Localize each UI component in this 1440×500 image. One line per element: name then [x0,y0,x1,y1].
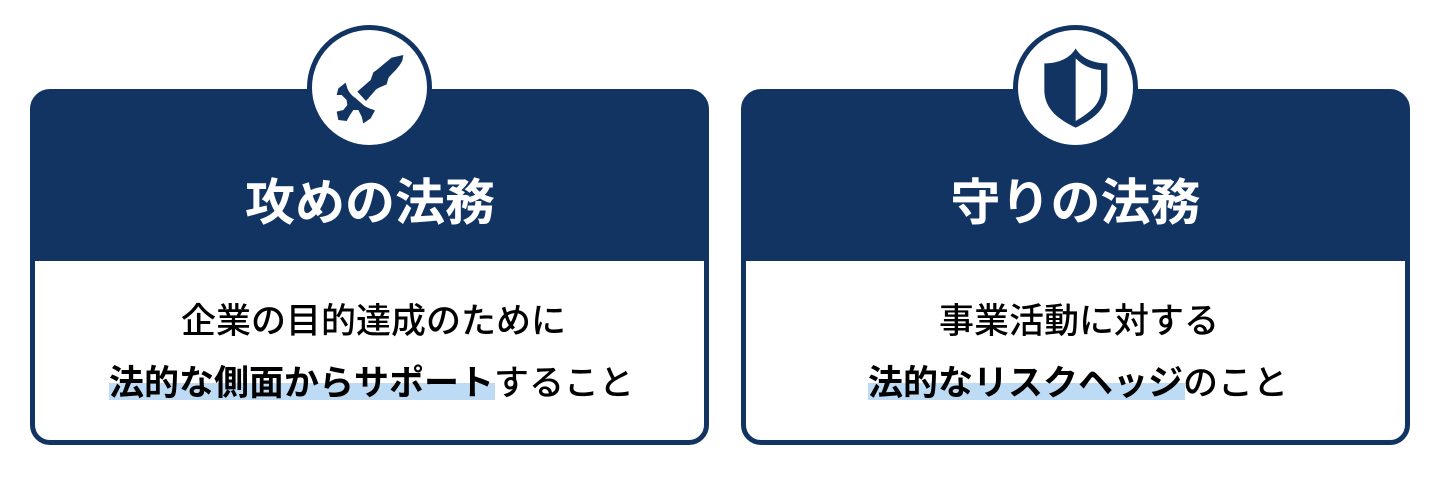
panel header: defensive [745,93,1406,261]
icon: sword in circle [310,28,430,148]
highlight: offensive [109,383,495,400]
panel: defensive legal work [741,89,1410,445]
text: defensive line 1: 事業活動に対する [939,302,1219,341]
text: offensive line 2: 法的な側面からサポートすること [109,364,634,403]
panel: offensive legal work [30,89,709,445]
icon: shield in circle [1016,28,1136,148]
heading: defensive: 守りの法務 [950,175,1200,231]
text: offensive line 1: 企業の目的達成のために [181,302,566,341]
panel header: offensive [34,93,705,261]
heading: offensive: 攻めの法務 [245,175,495,231]
text: defensive line 2: 法的なリスクヘッジのこと [868,364,1288,403]
highlight: defensive [868,383,1185,400]
